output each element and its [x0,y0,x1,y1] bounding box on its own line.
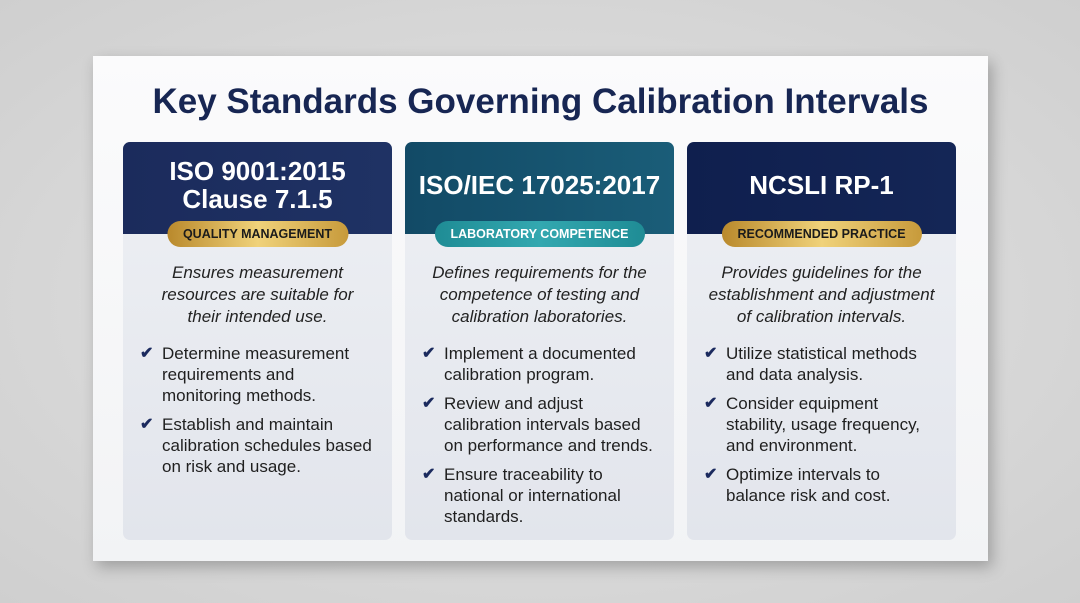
bullet list: Implement a documented [444,344,636,363]
badge: recommended practice [721,221,922,247]
bullet list: calibration schedules based [162,436,372,455]
bullet list: requirements and [162,365,294,384]
description: their intended use. [188,307,327,326]
badge: quality management [167,221,348,247]
description: establishment and adjustment [709,285,934,304]
bullet list: Review and adjust [444,394,583,413]
bullet list: Ensure traceability to [444,465,603,484]
bullet list: Consider equipment [726,394,878,413]
bullet list: ✔ [704,345,717,362]
badge: laboratory competence: LABORATORY COMPETENCE [450,227,629,241]
bullet list: and data analysis. [726,365,863,384]
bullet list: Establish and maintain [162,415,333,434]
bullet list: standards. [444,507,523,526]
header: NCSLI [687,142,956,234]
header: NCSLI: NCSLI RP-1 [749,170,894,200]
header: ISO/IEC 17025: ISO/IEC 17025:2017 [419,170,660,200]
bullet list: ✔ [140,345,153,362]
bullet list: ✔ [140,416,153,433]
bullet list [422,344,653,526]
description [709,263,936,326]
bullet list: national or international [444,486,621,505]
bullet list: Utilize statistical methods [726,344,917,363]
description [432,263,647,326]
bullet list: Determine measurement [162,344,349,363]
description: resources are suitable for [162,285,353,304]
description [162,263,354,326]
description: Defines requirements for the [432,263,647,282]
panel: ISO/IEC 17025 [405,142,674,540]
description: Ensures measurement [172,263,343,282]
badge: recommended practice: RECOMMENDED PRACTICE [737,227,906,241]
panel: NCSLI RP-1 [687,142,956,540]
header: ISO 9001: ISO 9001:2015 [169,156,346,186]
badge: laboratory competence [434,221,645,247]
description: Provides guidelines for the [721,263,922,282]
bullet list: monitoring methods. [162,386,316,405]
description: of calibration intervals. [737,307,906,326]
card [93,56,988,561]
panel: ISO 9001 [123,142,392,540]
bullet list: stability, usage frequency, [726,415,920,434]
header: ISO 9001: Clause 7.1.5 [182,184,333,214]
bullet list: on risk and usage. [162,457,301,476]
bullet list: and environment. [726,436,857,455]
bullet list [140,344,372,476]
bullet list: ✔ [422,466,435,483]
bullet list: Optimize intervals to [726,465,880,484]
bullet list: ✔ [704,466,717,483]
bullet list: ✔ [422,345,435,362]
badge: quality management: QUALITY MANAGEMENT [183,227,332,241]
bullet list: ✔ [422,395,435,412]
bullet list: ✔ [704,395,717,412]
title: Key Standards Governing Calibration Intervals [152,82,929,121]
bullet list: on performance and trends. [444,436,653,455]
bullet list: calibration intervals based [444,415,641,434]
bullet list: calibration program. [444,365,594,384]
bullet list [704,344,920,505]
description: competence of testing and [440,285,639,304]
bullet list: balance risk and cost. [726,486,890,505]
description: calibration laboratories. [452,307,627,326]
header: ISO/IEC 17025 [405,142,674,234]
header: ISO 9001 [123,142,392,234]
